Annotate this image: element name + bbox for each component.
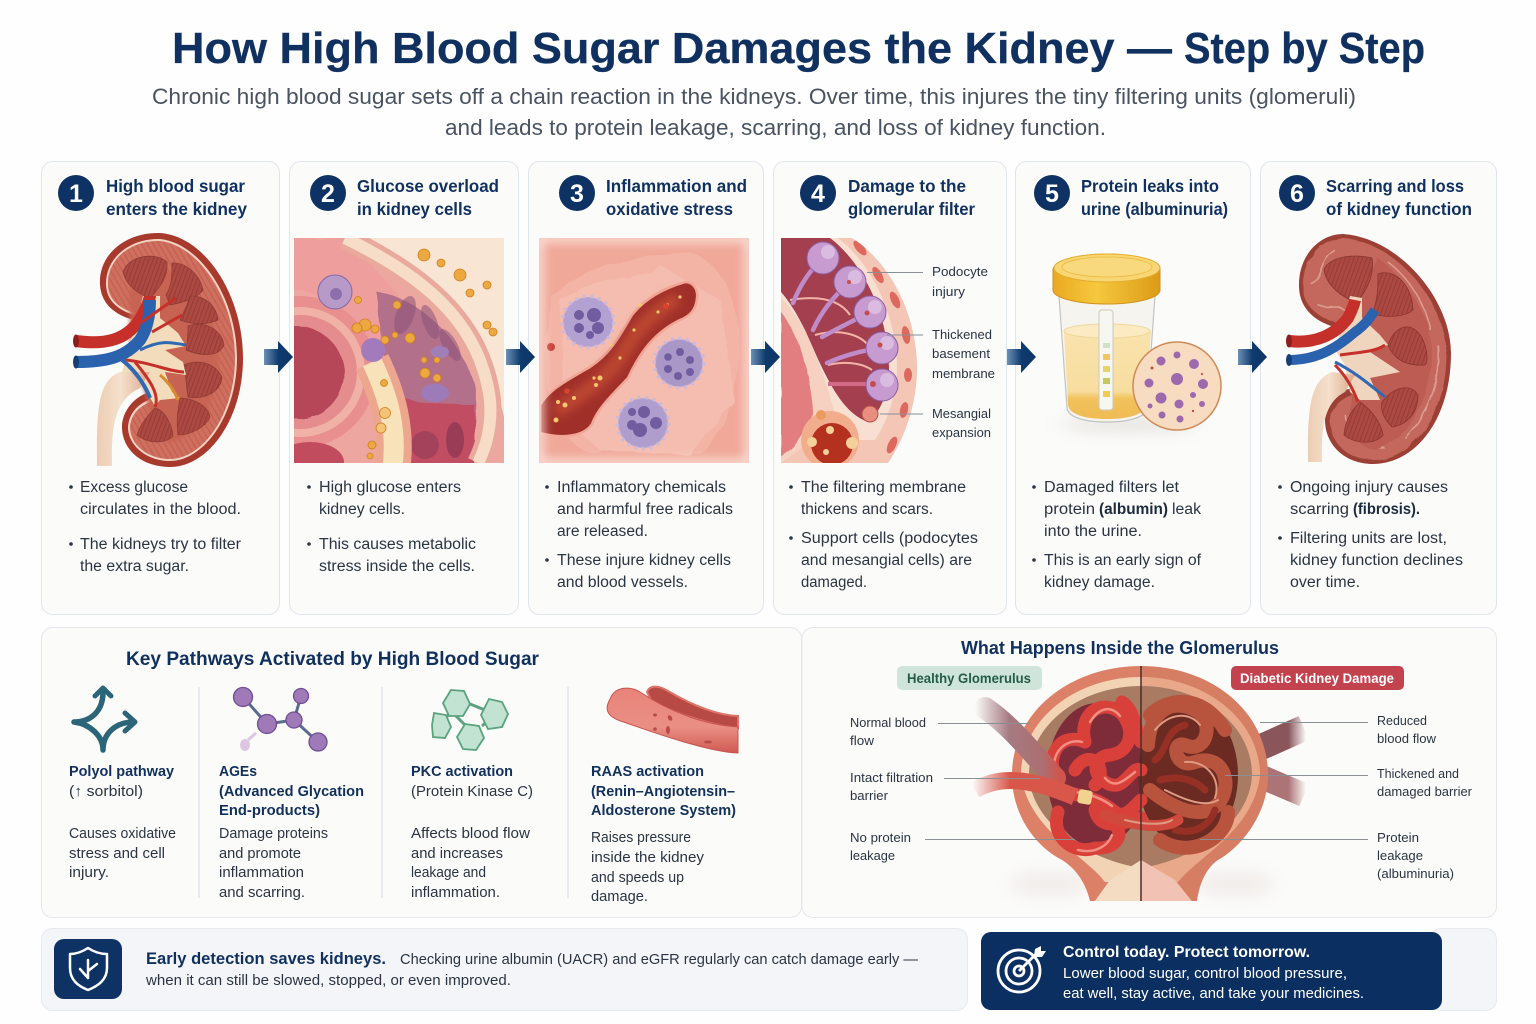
dividers <box>199 687 568 898</box>
panel: step 6 <box>1260 162 1496 614</box>
labels: damaged side <box>1377 713 1473 881</box>
number badge 5: 5 <box>1045 180 1059 208</box>
bullets: step 6: scarring <box>1290 501 1349 518</box>
number badge 6 <box>1279 175 1315 211</box>
bullets: step 1: The kidneys try to filter <box>80 536 241 553</box>
panel: step 2 <box>289 161 519 615</box>
text: AGEs: Damage proteins <box>219 826 328 842</box>
badge: healthy glomerulus <box>897 666 1042 690</box>
text: AGEs: inflammation <box>219 865 304 881</box>
arrow: step 3 to 4 <box>751 341 780 373</box>
text: RAAS activation: damage. <box>591 889 648 905</box>
panel: step 5 <box>1016 162 1250 614</box>
text: polyol pathway: Causes oxidative <box>69 826 176 842</box>
callouts: filter labels: membrane <box>932 366 995 381</box>
text: polyol pathway: stress and cell <box>69 846 165 862</box>
bullets: step 2 <box>307 479 476 575</box>
text: PKC activation: and increases <box>411 846 503 862</box>
labels: damaged side: Reduced <box>1377 713 1427 728</box>
callouts: filter labels: Thickened <box>932 327 992 342</box>
text: RAAS activation: inside the kidney <box>591 850 705 866</box>
icon: AGEs molecule <box>234 688 327 751</box>
heading: step 1: High blood sugar <box>106 176 245 196</box>
heading: glomerulus: What Happens Inside the Glomerulus <box>961 637 1279 658</box>
heading: step 6 <box>1326 176 1472 219</box>
text: control today: Control today. Protect tomorrow. <box>1063 944 1310 961</box>
text: AGEs: End-products) <box>219 803 320 819</box>
text: AGEs: AGEs <box>219 764 257 780</box>
number badge 6: 6 <box>1290 180 1304 208</box>
number badge 2 <box>310 175 346 211</box>
text: polyol pathway: (↑ sorbitol) <box>69 784 143 800</box>
text: PKC activation: PKC activation <box>411 764 513 780</box>
illustration: scarred kidney <box>1286 234 1451 464</box>
heading: step 2: Glucose overload <box>357 176 499 196</box>
number badge 1: 1 <box>69 180 83 208</box>
number badge 1 <box>58 175 94 211</box>
bullets: step 4: Support cells (podocytes <box>801 530 978 547</box>
heading: step 3: oxidative stress <box>606 199 733 219</box>
number badge 3: 3 <box>570 180 584 208</box>
callouts: filter labels: Mesangial <box>932 406 991 421</box>
text: RAAS activation <box>591 764 736 905</box>
heading: step 5: urine (albuminuria) <box>1081 199 1228 219</box>
text: RAAS activation: RAAS activation <box>591 764 704 780</box>
panel: key pathways <box>42 628 802 918</box>
text: AGEs: and scarring. <box>219 885 305 901</box>
bullets: step 1: the extra sugar. <box>80 558 189 575</box>
panel: early detection <box>42 928 968 1010</box>
illustration: glomerular filter <box>781 238 921 469</box>
labels: damaged side: Thickened and <box>1377 766 1459 781</box>
callouts: filter labels <box>932 264 995 440</box>
panel: inside the glomerulus <box>802 628 1496 918</box>
bullets: step 3: and harmful free radicals <box>557 501 733 518</box>
panel: step 3 <box>528 162 764 614</box>
number badge 5 <box>1034 175 1070 211</box>
panel: control today <box>981 932 1442 1010</box>
callouts: filter labels: basement <box>932 346 990 361</box>
heading: key pathways: Key Pathways Activated by High Blood Sugar <box>126 649 540 670</box>
text: PKC activation: inflammation. <box>411 885 500 901</box>
illustration: kidney <box>73 233 243 467</box>
subtitle <box>152 84 1356 140</box>
text: early detection: Checking urine albumin (UACR) and eGFR regularly can catch damage early — <box>400 952 918 968</box>
callouts: filter labels: Podocyte <box>932 264 988 279</box>
text: PKC activation: Affects blood flow <box>411 826 530 842</box>
illustration: glomerulus comparison <box>975 660 1304 910</box>
text: RAAS activation: Aldosterone System) <box>591 803 736 819</box>
subtitle: Chronic high blood sugar sets off a chain reaction in the kidneys. Over time, this injures the tiny filtering units (glomeruli) <box>152 84 1356 109</box>
arrow: step 4 to 5 <box>1007 341 1036 373</box>
bullets: step 6: (fibrosis). <box>1353 501 1420 518</box>
bullets: step 5: This is an early sign of <box>1044 552 1202 569</box>
heading: step 1: enters the kidney <box>106 199 247 219</box>
bullets: step 5: into the urine. <box>1044 523 1142 540</box>
text: control today: Lower blood sugar, control blood pressure, <box>1063 966 1347 982</box>
badge: diabetic kidney damage: Diabetic Kidney Damage <box>1240 671 1394 686</box>
callout lines: filter <box>867 272 923 414</box>
bullets: step 3: are released. <box>557 523 648 540</box>
bullets: step 6: kidney function declines <box>1290 552 1463 569</box>
labels: damaged side: (albuminuria) <box>1377 866 1454 881</box>
icon: PKC hexagons <box>432 690 508 750</box>
callouts: filter labels: injury <box>932 284 966 299</box>
illustration: inflammation in vessel <box>539 238 749 463</box>
text: polyol pathway: Polyol pathway <box>69 764 175 780</box>
bullets: step 6 <box>1278 479 1463 591</box>
panel: step 1 <box>42 162 280 614</box>
bullets: step 3 <box>545 479 733 591</box>
title: Step by Step <box>1184 24 1425 73</box>
heading: step 5 <box>1081 176 1228 219</box>
bullets: step 2: stress inside the cells. <box>319 558 475 575</box>
callout lines: glomerulus <box>925 722 1368 840</box>
panel: step 4 <box>774 162 1006 614</box>
bullets: step 2: kidney cells. <box>319 501 405 518</box>
labels: damaged side: blood flow <box>1377 731 1437 746</box>
labels: healthy side: barrier <box>850 788 889 803</box>
labels: damaged side: leakage <box>1377 848 1423 863</box>
arrow: step 2 to 3 <box>506 341 535 373</box>
panel: control today background <box>1430 928 1496 1010</box>
text: AGEs: (Advanced Glycation <box>219 784 364 800</box>
bullets: step 6: Ongoing injury causes <box>1290 479 1448 496</box>
bullets: step 5 <box>1032 479 1202 591</box>
bullets: step 5: protein <box>1044 501 1095 518</box>
badge: diabetic kidney damage <box>1231 666 1404 690</box>
text: PKC activation <box>411 764 533 901</box>
icon: shield <box>54 939 122 999</box>
bullets: step 2: High glucose enters <box>319 479 461 496</box>
heading: step 4 <box>848 176 975 219</box>
bullets: step 5: kidney damage. <box>1044 574 1155 591</box>
bullets: step 3: and blood vessels. <box>557 574 688 591</box>
bullets: step 4: damaged. <box>801 574 867 591</box>
bullets: step 3: These injure kidney cells <box>557 552 731 569</box>
text: early detection: when it can still be slowed, stopped, or even improved. <box>145 973 511 989</box>
text: polyol pathway <box>69 764 176 881</box>
bullets: step 4: The filtering membrane <box>801 479 966 496</box>
bullets: step 4 <box>789 479 978 591</box>
icon: RAAS blood vessel <box>607 687 738 753</box>
heading: step 2: in kidney cells <box>357 199 472 219</box>
bullets: step 1 <box>69 479 241 575</box>
bullets: step 6: over time. <box>1290 574 1360 591</box>
bullets: step 4: thickens and scars. <box>801 501 933 518</box>
bullets: step 2: This causes metabolic <box>319 536 476 553</box>
heading: step 3: Inflammation and <box>606 176 747 196</box>
heading: step 6: of kidney function <box>1326 199 1472 219</box>
number badge 3 <box>559 175 595 211</box>
labels: damaged side: damaged barrier <box>1377 784 1473 799</box>
badge: healthy glomerulus: Healthy Glomerulus <box>907 671 1031 686</box>
heading: step 3 <box>606 176 747 219</box>
heading: step 4: Damage to the <box>848 176 966 196</box>
bullets: step 1: circulates in the blood. <box>80 501 241 518</box>
heading: step 4: glomerular filter <box>848 199 975 219</box>
text: control today: eat well, stay active, and take your medicines. <box>1063 986 1364 1002</box>
bullets: step 6: Filtering units are lost, <box>1290 530 1447 547</box>
bullets: step 5: Damaged filters let <box>1044 479 1180 496</box>
text: PKC activation: (Protein Kinase C) <box>411 784 533 800</box>
labels: healthy side: flow <box>850 733 875 748</box>
heading: step 5: Protein leaks into <box>1081 176 1219 196</box>
bullets: step 5: (albumin) <box>1099 501 1168 518</box>
icon: polyol branching arrows <box>74 688 135 750</box>
arrow: step 1 to 2 <box>264 341 293 373</box>
callouts: filter labels: expansion <box>932 425 991 440</box>
heading: step 1 <box>106 176 247 219</box>
labels: healthy side: No protein <box>850 830 911 845</box>
labels: damaged side: Protein <box>1377 830 1419 845</box>
text: control today <box>1063 944 1364 1002</box>
labels: healthy side: Normal blood <box>850 715 926 730</box>
title: How High Blood Sugar Damages the Kidney — <box>172 24 1172 73</box>
text: early detection: Early detection saves kidneys. <box>146 949 386 968</box>
illustration: urine cup with protein magnifier <box>1053 254 1221 432</box>
bullets: step 5: leak <box>1172 501 1201 518</box>
heading: step 2 <box>357 176 499 219</box>
number badge 4 <box>800 175 836 211</box>
bullets: step 3: Inflammatory chemicals <box>557 479 726 496</box>
number badge 4: 4 <box>811 180 825 208</box>
text: RAAS activation: and speeds up <box>591 870 684 886</box>
arrow: step 5 to 6 <box>1238 341 1267 373</box>
labels: healthy side: leakage <box>850 848 895 863</box>
heading: step 6: Scarring and loss <box>1326 176 1464 196</box>
labels: healthy side <box>850 715 933 863</box>
icon: target with arrow <box>998 946 1046 992</box>
illustration: kidney cells with glucose <box>294 238 504 463</box>
subtitle: and leads to protein leakage, scarring, and loss of kidney function. <box>445 115 1106 140</box>
bullets: step 1: Excess glucose <box>80 479 188 496</box>
text: PKC activation: leakage and <box>411 865 486 881</box>
number badge 2: 2 <box>321 180 335 208</box>
text: AGEs: and promote <box>219 846 301 862</box>
text: RAAS activation: Raises pressure <box>591 830 691 846</box>
text: early detection <box>145 949 918 989</box>
labels: healthy side: Intact filtration <box>850 770 933 785</box>
text: RAAS activation: (Renin–Angiotensin– <box>591 784 735 800</box>
text: polyol pathway: injury. <box>69 865 109 881</box>
text: AGEs <box>219 764 364 901</box>
bullets: step 4: and mesangial cells) are <box>801 552 972 569</box>
